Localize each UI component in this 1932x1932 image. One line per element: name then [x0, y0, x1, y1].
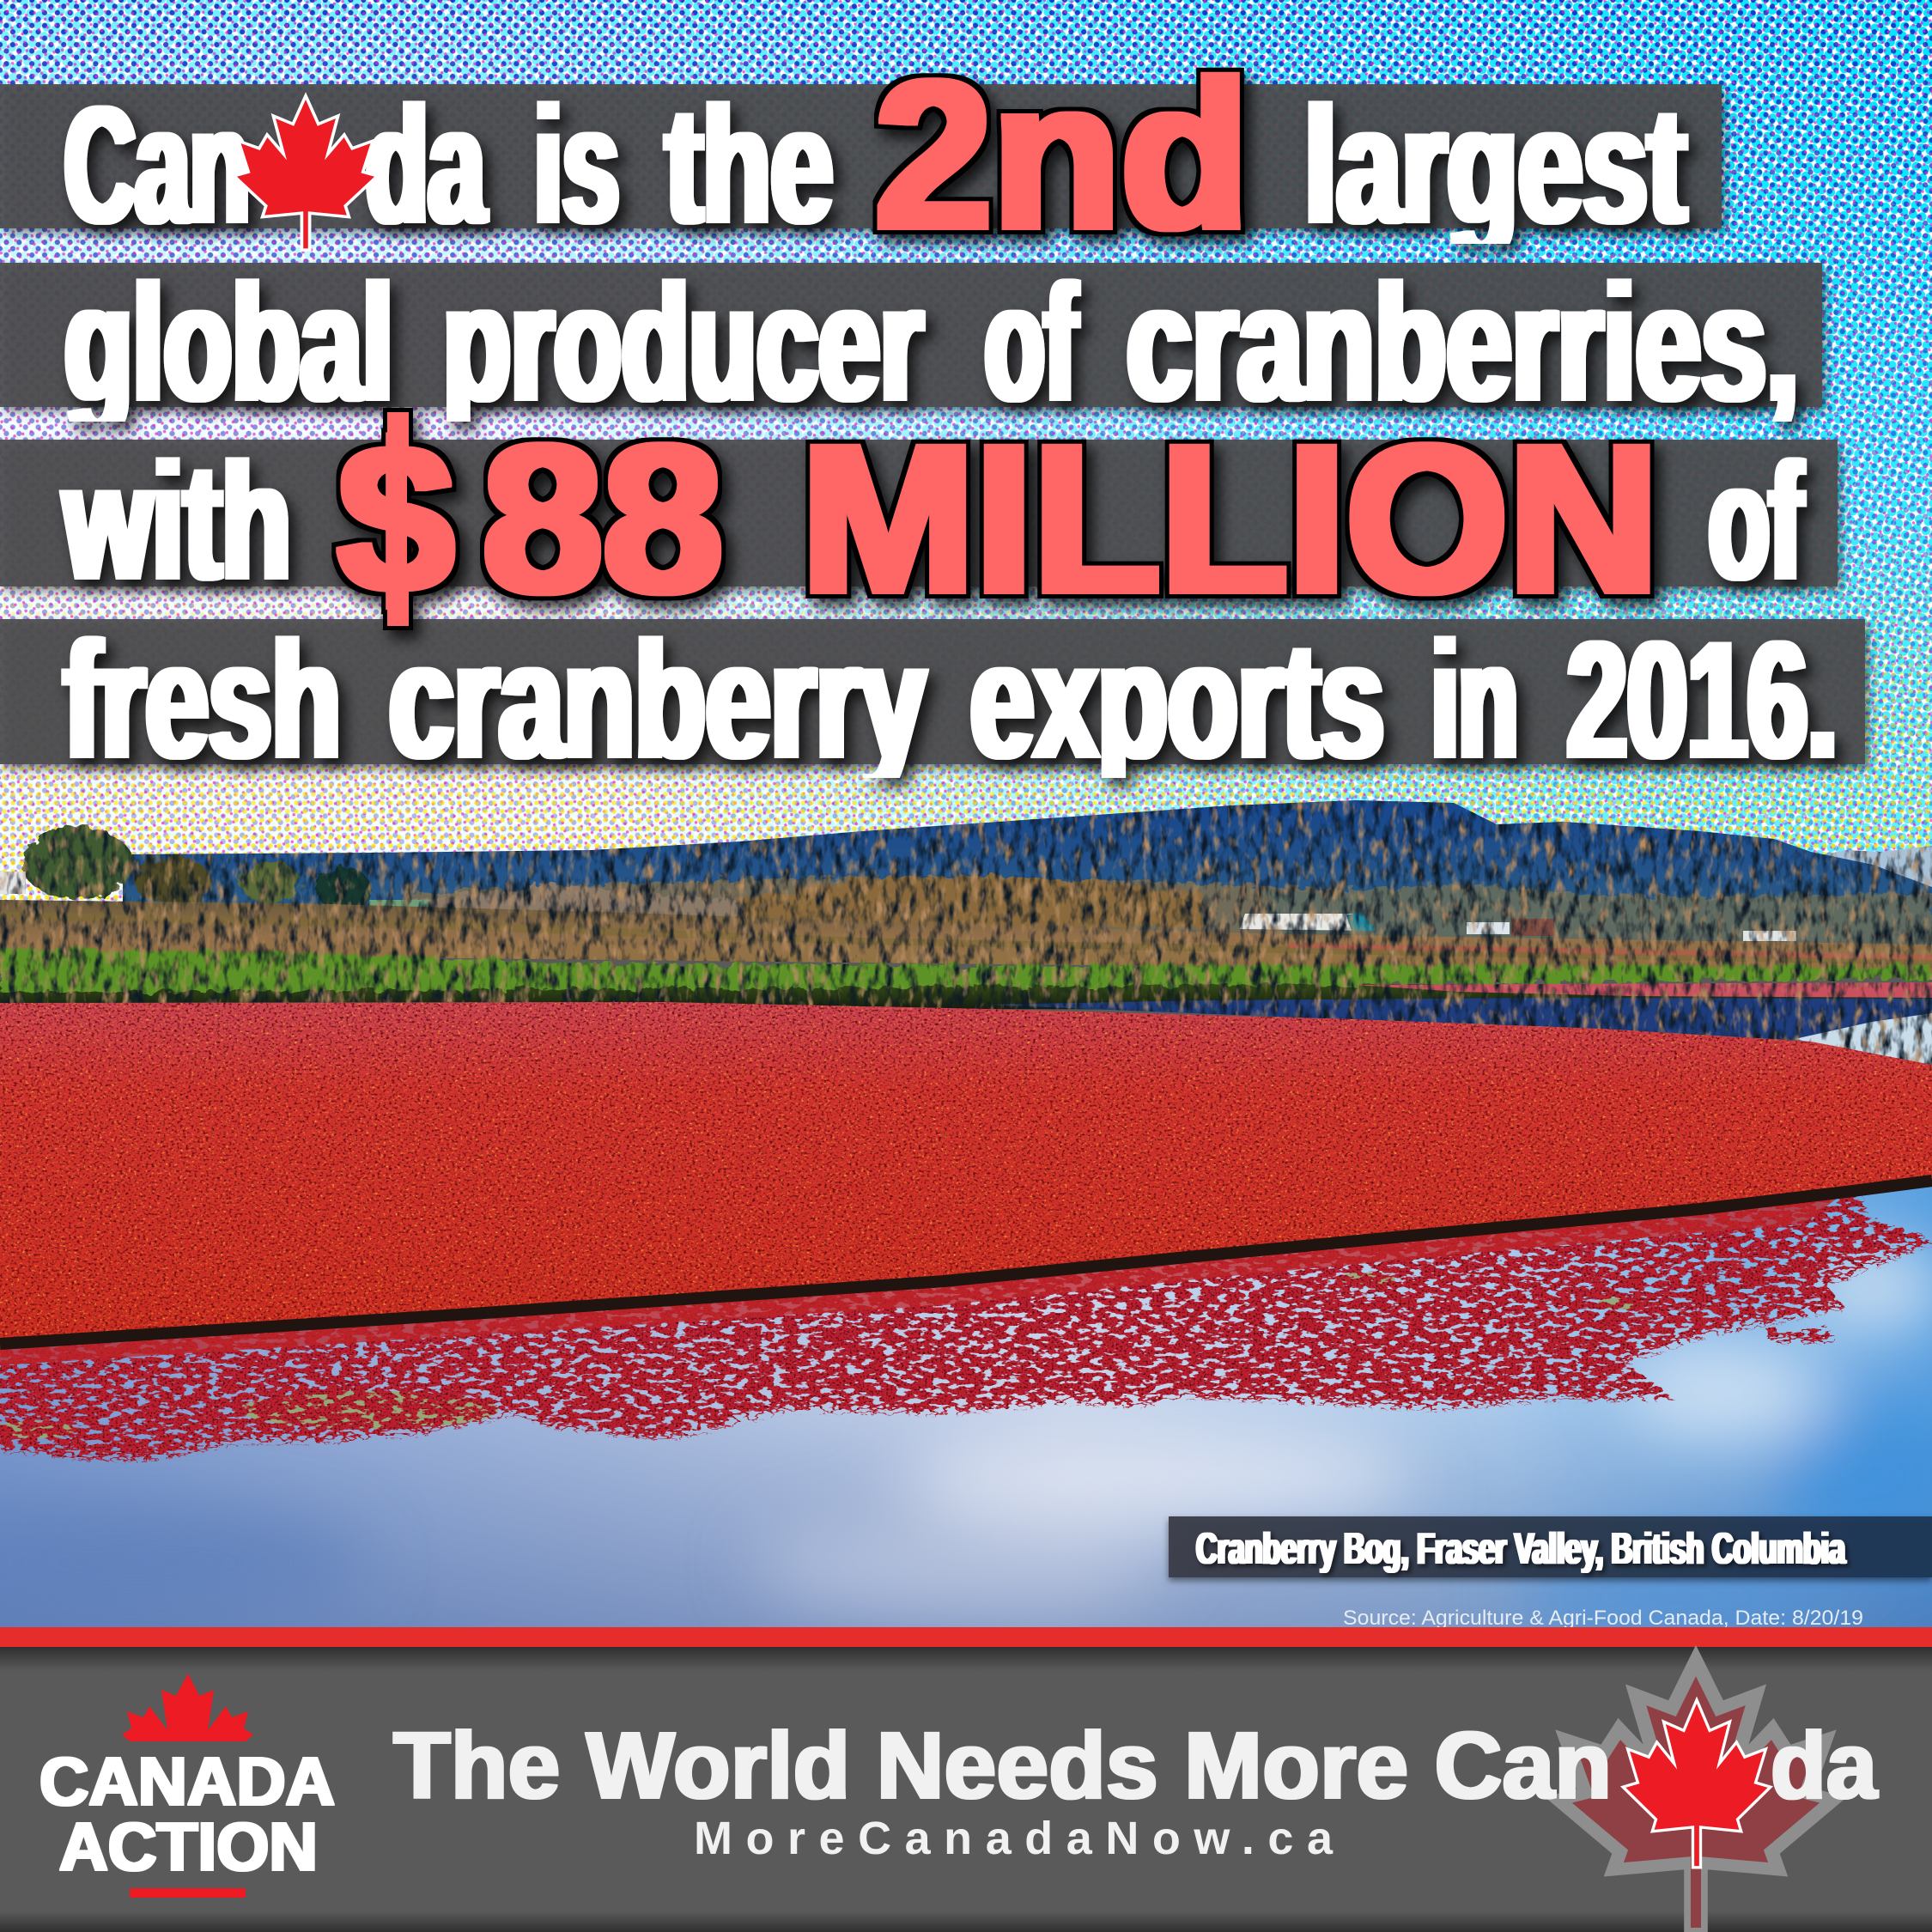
- photo: main cranberry raft: [0, 1002, 1932, 1344]
- headline line 2: of: [985, 250, 1077, 436]
- logo: Canada Action: [39, 1674, 335, 1898]
- photo: loose floating cranberries: [0, 1185, 1932, 1460]
- headline line 1: is: [534, 72, 619, 258]
- headline line 1: Can: [64, 72, 250, 258]
- headline line 1: the: [665, 72, 833, 258]
- tree line: [21, 827, 1932, 953]
- headline line 3: [63, 401, 1802, 637]
- headline line 4: in: [1431, 607, 1518, 793]
- headline line 4: exports: [970, 607, 1384, 793]
- headline line 3: MILLION: [801, 401, 1659, 637]
- headline line 2: global: [64, 250, 393, 436]
- photo: lily pad patches: [0, 1273, 1649, 1438]
- logo word Canada: CANADA: [39, 1743, 335, 1820]
- dark reflection band: [0, 981, 1932, 1010]
- halftone sky background: [0, 0, 1932, 902]
- headline line 4: cranberry: [389, 607, 926, 793]
- icon: maple leaf in headline: [237, 100, 374, 248]
- headline line 1: largest: [1304, 72, 1686, 258]
- photo: Fraser Valley landscape horizon: [0, 800, 1932, 1069]
- headline line 3: with: [63, 428, 291, 615]
- clouds in reflection: [0, 1245, 1932, 1649]
- headline line 3: of: [1709, 428, 1802, 615]
- headline line 1: 2nd: [875, 37, 1249, 273]
- source line: Source: Agriculture & Agri-Food Canada, Date: 8/20/19: [1343, 1607, 1863, 1630]
- headline line 4: fresh: [64, 607, 341, 793]
- footer panel: [0, 1627, 1932, 1932]
- bar line 1: [0, 84, 1722, 228]
- headline line 3: $: [338, 401, 453, 637]
- blue reflection water: [987, 998, 1932, 1065]
- photo: containment boom: [0, 1181, 1932, 1344]
- photo: dense berries just under the boom: [0, 1192, 1846, 1365]
- bar line 2: [0, 263, 1822, 407]
- red rule: [0, 1627, 1932, 1647]
- brown farmland: [0, 900, 1932, 975]
- tagline: da: [1771, 1713, 1878, 1819]
- headline text: [63, 37, 1838, 793]
- logo word Action: ACTION: [59, 1808, 318, 1885]
- caption bar: [1169, 1516, 1932, 1577]
- icon: logo maple leaf top: [122, 1674, 253, 1741]
- distant pale mountains: [1803, 846, 1932, 910]
- headline line 1: [64, 65, 1704, 263]
- logo underline: [130, 1888, 246, 1898]
- headline line 1: da: [366, 72, 486, 258]
- bar line 4: [0, 619, 1865, 764]
- headline line 4: [61, 635, 1850, 798]
- green bank: [0, 948, 1932, 993]
- photo: water reflecting sky: [0, 1168, 1932, 1649]
- pink bog strip: [1355, 982, 1932, 998]
- farm buildings: [0, 872, 1796, 941]
- forested blue mountain: [123, 800, 1932, 953]
- headline line 2: producer: [443, 250, 923, 436]
- headline bars: [0, 84, 1865, 764]
- headline line 3: 88: [483, 401, 723, 637]
- headline line 2: [64, 278, 1812, 440]
- icon: large faded maple leaf: [1558, 1661, 1833, 1929]
- icon: maple leaf in footer: [1625, 1704, 1768, 1866]
- website url: MoreCanadaNow.ca: [694, 1813, 1334, 1864]
- bar line 3: [0, 440, 1838, 586]
- tagline: The World Needs More Can: [393, 1713, 1612, 1819]
